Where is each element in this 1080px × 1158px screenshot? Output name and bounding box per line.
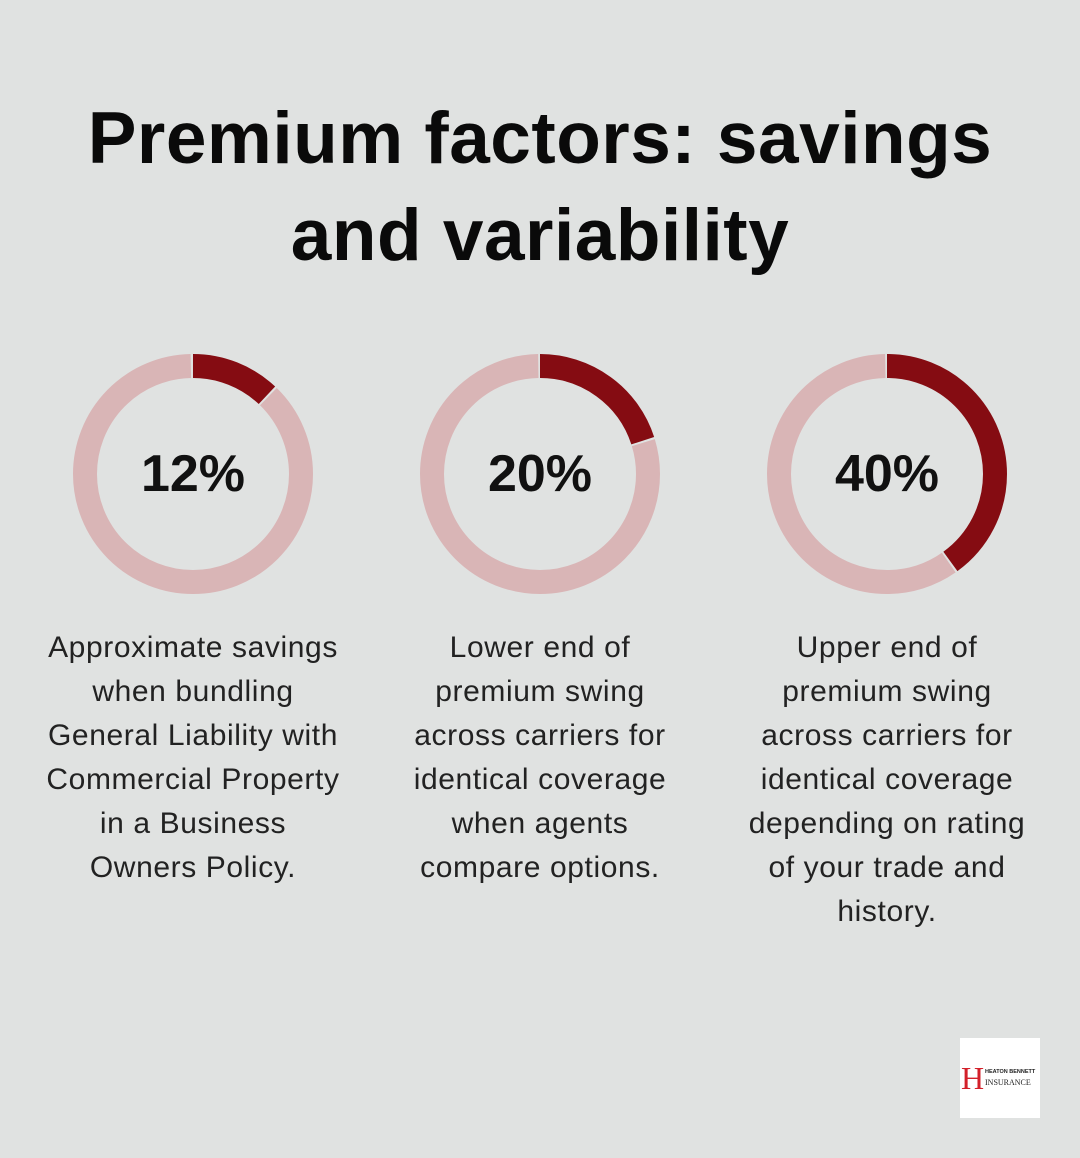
text: 40% description: across carriers for — [761, 719, 1013, 752]
logo: H — [961, 1060, 984, 1096]
text: 40% description — [749, 631, 1025, 928]
text: 40% description: history. — [837, 895, 937, 928]
donut: 20% — [420, 354, 660, 594]
title — [88, 98, 992, 276]
donut: 12%: 12% — [141, 445, 245, 503]
text: 40% description: Upper end of — [797, 631, 977, 664]
donut: 40% — [767, 354, 1007, 594]
text: 20% description: compare options. — [420, 851, 660, 884]
text: 12% description: Approximate savings — [48, 631, 338, 664]
text: 12% description: Commercial Property — [46, 763, 340, 796]
text: 20% description: across carriers for — [414, 719, 666, 752]
text: 20% description: when agents — [452, 807, 628, 840]
text: 12% description — [46, 631, 340, 884]
donut: 12% — [73, 354, 313, 594]
logo: INSURANCE — [985, 1078, 1031, 1087]
text: 12% description: Owners Policy. — [90, 851, 296, 884]
title: and variability — [291, 195, 789, 276]
text: 12% description: in a Business — [100, 807, 286, 840]
text: 12% description: when bundling — [92, 675, 294, 708]
text: 40% description: depending on rating — [749, 807, 1025, 840]
text: 20% description: Lower end of — [450, 631, 630, 664]
text: 20% description — [414, 631, 666, 884]
text: 40% description: premium swing — [782, 675, 992, 708]
donut: 20%: 20% — [488, 445, 592, 503]
text: 40% description: of your trade and — [768, 851, 1006, 884]
title: Premium factors: savings — [88, 98, 992, 179]
donut: 40%: 40% — [835, 445, 939, 503]
logo — [960, 1038, 1040, 1118]
text: 12% description: General Liability with — [48, 719, 338, 752]
text: 40% description: identical coverage — [761, 763, 1013, 796]
text: 20% description: premium swing — [435, 675, 645, 708]
logo: HEATON BENNETT — [985, 1069, 1035, 1075]
text: 20% description: identical coverage — [414, 763, 666, 796]
